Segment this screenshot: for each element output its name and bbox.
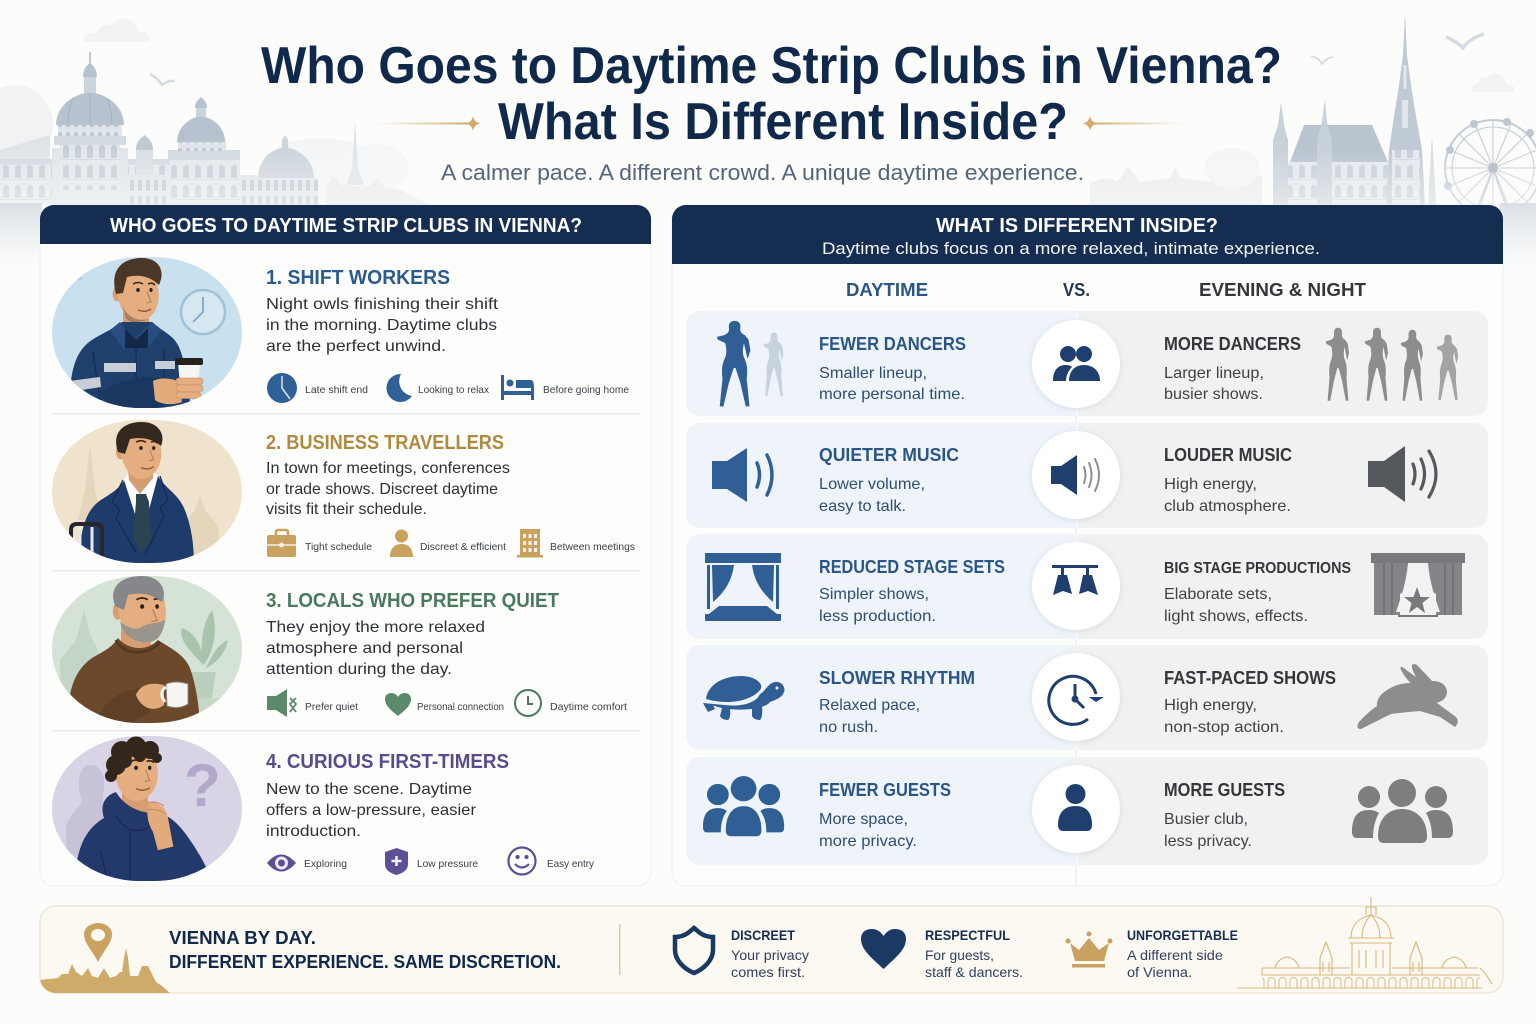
icon: single dancer (717, 321, 783, 406)
evening text: non-stop action. (1164, 719, 1284, 736)
card text: In town for meetings, conferences (266, 460, 510, 477)
row: music (686, 423, 1488, 528)
value: respectful: RESPECTFUL (925, 927, 1010, 943)
daytime text (819, 334, 966, 403)
panel heading: WHAT IS DIFFERENT INSIDE? (936, 215, 1218, 237)
row: rhythm (686, 645, 1488, 750)
label: daytime comfort: Daytime comfort (550, 701, 627, 713)
card text: in the morning. Daytime clubs (266, 317, 497, 334)
value: discreet: DISCREET (731, 927, 795, 943)
daytime text: QUIETER MUSIC (819, 445, 959, 465)
card text: attention during the day. (266, 661, 452, 678)
column label: daytime: DAYTIME (846, 280, 928, 300)
portrait: business traveller (52, 420, 242, 565)
icon circle: stage lights (1032, 542, 1120, 630)
icon: bed (501, 375, 534, 400)
daytime text: more privacy. (819, 833, 917, 850)
value: respectful: staff & dancers. (925, 964, 1023, 980)
icon: loud speaker (1368, 446, 1436, 502)
panel: what is different (672, 205, 1503, 886)
evening text: LOUDER MUSIC (1164, 445, 1292, 465)
title (261, 37, 1282, 151)
card text: visits fit their schedule. (266, 501, 427, 518)
main dome building (52, 148, 128, 198)
daytime text: Simpler shows, (819, 586, 929, 603)
value: discreet (731, 927, 809, 980)
card title: 4. CURIOUS FIRST-TIMERS (266, 751, 509, 773)
icon: heart (861, 929, 906, 969)
evening text (1164, 668, 1336, 736)
row: dancers (686, 311, 1488, 416)
daytime text: Relaxed pace, (819, 697, 920, 714)
value: respectful (925, 927, 1023, 980)
card title: 3. LOCALS WHO PREFER QUIET (266, 590, 559, 612)
daytime text: REDUCED STAGE SETS (819, 557, 1005, 577)
icon: many dancers (1326, 328, 1458, 401)
card: shift workers (52, 257, 629, 410)
icon circle: speaker (1032, 431, 1120, 519)
label: exploring: Exploring (304, 858, 347, 870)
small tower (136, 150, 153, 175)
footer slogan: DIFFERENT EXPERIENCE. SAME DISCRETION. (169, 952, 561, 972)
icon: briefcase (267, 530, 296, 557)
card title: 1. SHIFT WORKERS (266, 267, 450, 289)
label: between meetings: Between meetings (550, 541, 635, 553)
icon: rabbit (1357, 664, 1458, 729)
panel subheading: Daytime clubs focus on a more relaxed, intimate experience. (822, 239, 1320, 258)
icon circle: people (1032, 320, 1120, 408)
evening text: Elaborate sets, (1164, 586, 1272, 603)
footer slogan: VIENNA BY DAY. (169, 928, 316, 948)
footer skyline (40, 948, 170, 993)
icon: fewer guests (703, 776, 784, 836)
panel: who goes (40, 205, 651, 886)
card: locals who prefer quiet (52, 576, 627, 725)
daytime text: easy to talk. (819, 498, 906, 515)
evening text (1164, 445, 1292, 515)
label: low pressure: Low pressure (417, 858, 478, 870)
card text: are the perfect unwind. (266, 338, 446, 355)
cloud right (1472, 73, 1515, 92)
label: tight schedule: Tight schedule (305, 541, 372, 553)
daytime text: Lower volume, (819, 476, 925, 493)
icon: shield (675, 928, 713, 973)
value: unforgettable: of Vienna. (1127, 964, 1192, 980)
portrait: first-timer: ? (184, 752, 221, 819)
evening text: High energy, (1164, 697, 1257, 714)
cloud left (83, 18, 150, 42)
evening text (1164, 780, 1285, 850)
evening text: BIG STAGE PRODUCTIONS (1164, 560, 1351, 577)
icon: crown (1066, 932, 1112, 968)
evening text (1164, 334, 1301, 403)
icon: person (390, 530, 413, 557)
daytime text: FEWER DANCERS (819, 334, 966, 354)
panel heading: WHO GOES TO DAYTIME STRIP CLUBS IN VIENNA? (110, 215, 582, 237)
card text (266, 460, 510, 518)
row: stage (686, 534, 1488, 639)
portrait: local with mug (52, 576, 242, 725)
evening text: FAST-PACED SHOWS (1164, 668, 1336, 688)
daytime text: Smaller lineup, (819, 365, 927, 382)
evening text: busier shows. (1164, 386, 1263, 403)
value: respectful: For guests, (925, 947, 994, 963)
value: unforgettable: UNFORGETTABLE (1127, 927, 1238, 943)
card text: offers a low-pressure, easier (266, 802, 477, 819)
icon: smiley (508, 848, 536, 874)
evening text: less privacy. (1164, 833, 1252, 850)
daytime text: more personal time. (819, 386, 965, 403)
panel header: what is different (672, 205, 1503, 264)
icon: muted speaker (267, 689, 296, 717)
card text: Night owls finishing their shift (266, 296, 499, 313)
label: looking to relax: Looking to relax (418, 384, 490, 396)
daytime text: no rush. (819, 719, 878, 736)
icon circle: single guest (1032, 765, 1120, 853)
column label: evening and night: EVENING & NIGHT (1199, 280, 1366, 300)
panel header: who goes (40, 205, 651, 244)
icon: map pin (84, 923, 112, 962)
label: easy entry: Easy entry (547, 858, 595, 870)
icon: eye (267, 854, 296, 872)
skyline: left Vienna domes (0, 52, 430, 205)
evening text (1164, 560, 1351, 625)
value: unforgettable (1127, 927, 1238, 980)
icon: heart (385, 693, 411, 716)
footer slogan (169, 928, 561, 972)
skyline: right Vienna cathedral and ferris wheel (1090, 14, 1536, 205)
daytime text (819, 668, 975, 736)
card text (266, 781, 477, 840)
card text: They enjoy the more relaxed (266, 619, 485, 636)
icon: building (517, 529, 543, 558)
portrait: shift worker (52, 257, 242, 410)
far spire (346, 120, 364, 185)
daytime text (819, 445, 959, 515)
evening text: MORE DANCERS (1164, 334, 1301, 354)
card text: atmosphere and personal (266, 640, 463, 657)
portrait: first-timer (52, 736, 242, 883)
icon: late shift end (267, 373, 297, 403)
evening text: Busier club, (1164, 811, 1248, 828)
card text (266, 619, 485, 678)
card text: New to the scene. Daytime (266, 781, 472, 798)
icon: more guests (1352, 779, 1453, 843)
label: before going home: Before going home (543, 384, 629, 396)
illustration: gold palace (1237, 897, 1492, 988)
title: What Is Different Inside? (498, 93, 1068, 151)
daytime text (819, 557, 1005, 625)
icon: shield plus (385, 848, 408, 875)
side fog (0, 203, 1536, 270)
card title: 2. BUSINESS TRAVELLERS (266, 432, 504, 454)
icon circle: clock with arrow (1032, 653, 1120, 741)
icon: turtle (703, 676, 785, 720)
icon: birds (150, 34, 1484, 85)
icon: big stage (1371, 553, 1465, 617)
icon: moon (387, 374, 412, 402)
evening text: High energy, (1164, 476, 1257, 493)
row: guests (686, 757, 1488, 865)
daytime text: SLOWER RHYTHM (819, 668, 975, 688)
evening text: club atmosphere. (1164, 498, 1291, 515)
daytime text: More space, (819, 811, 908, 828)
subtitle: A calmer pace. A different crowd. A unique daytime experience. (441, 160, 1084, 185)
daytime text: less production. (819, 608, 936, 625)
title ornament left (375, 116, 480, 131)
daytime text (819, 780, 951, 850)
value: discreet: Your privacy (731, 947, 809, 963)
second dome (170, 158, 240, 205)
value: discreet: comes first. (731, 964, 805, 980)
icon: clock (515, 690, 541, 716)
value: unforgettable: A different side (1127, 947, 1223, 963)
daytime text: FEWER GUESTS (819, 780, 951, 800)
card text: introduction. (266, 823, 361, 840)
card text (266, 296, 499, 355)
card: curious first-timers (52, 736, 595, 883)
evening text: MORE GUESTS (1164, 780, 1285, 800)
title ornament right (1083, 116, 1184, 131)
title: Who Goes to Daytime Strip Clubs in Vienna? (261, 37, 1282, 95)
icon: small stage (705, 553, 781, 621)
card text: or trade shows. Discreet daytime (266, 481, 498, 498)
evening text: light shows, effects. (1164, 608, 1308, 625)
footer banner (40, 897, 1503, 993)
label: late shift end: Late shift end (305, 384, 368, 396)
icon: low speaker (712, 448, 772, 502)
card: business travellers (52, 420, 635, 565)
label: prefer quiet: Prefer quiet (305, 701, 358, 713)
evening text: Larger lineup, (1164, 365, 1264, 382)
ferris wheel (1444, 119, 1536, 205)
label: discreet and efficient: Discreet & efficient (420, 541, 506, 553)
label: personal connection: Personal connection (417, 701, 504, 713)
column label: versus: VS. (1063, 280, 1090, 300)
cathedral (1290, 125, 1388, 162)
